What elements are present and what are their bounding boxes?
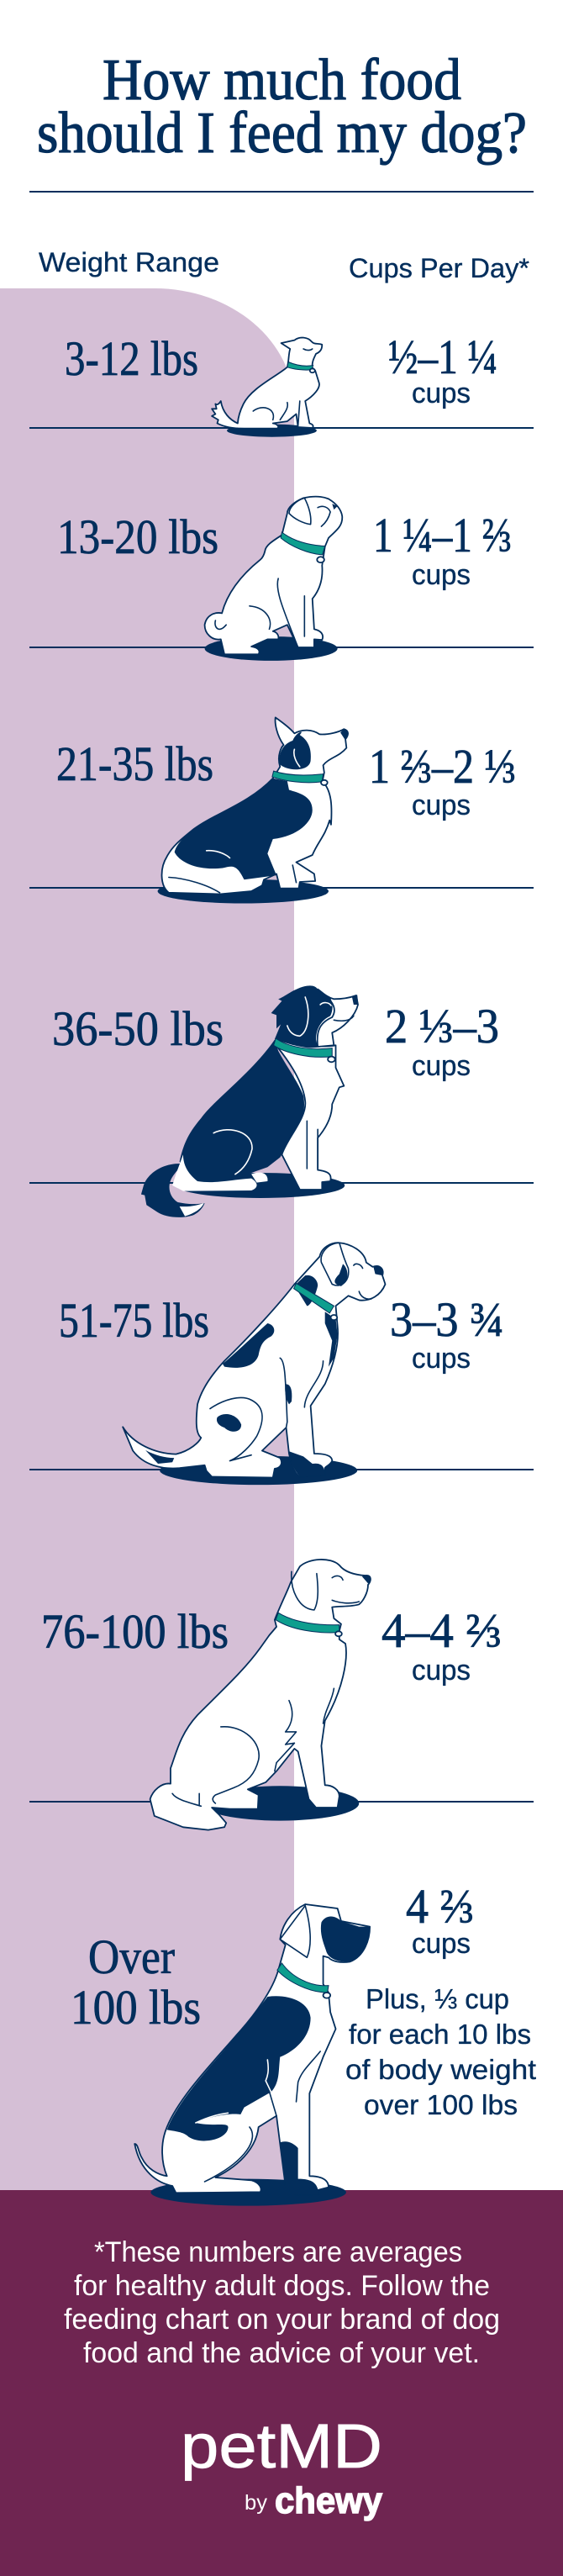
row 1 label: 3-12 lbs: 3-12 lbs — [65, 331, 198, 386]
row 7 label: over 100 lbs — [71, 1929, 201, 2035]
row 3 amount: 1 ⅔–2 ⅓ — [369, 739, 516, 794]
logo: petMD by chewy: chewy — [275, 2480, 383, 2521]
logo: petMD by chewy: by — [245, 2491, 268, 2515]
logo: petMD by chewy — [181, 2411, 383, 2521]
row 7 extra note: for each 10 lbs — [349, 2019, 531, 2050]
row 7 amount: 4 ⅔ — [406, 1879, 474, 1934]
title: How much food — [103, 48, 461, 113]
title: should I feed my dog? — [37, 101, 527, 166]
row 4 amount: 2 ⅓–3 — [385, 999, 499, 1053]
panel: lilac weight column — [0, 288, 294, 2191]
footer disclaimer: *These numbers are averages — [94, 2236, 462, 2268]
dog 4: black dog with white chest and dark tail — [141, 985, 358, 1217]
row 4 amount — [385, 999, 499, 1082]
heading: weight range: Weight Range — [39, 247, 219, 277]
footer disclaimer: for healthy adult dogs. Follow the — [74, 2270, 490, 2302]
row 1 amount: ½–1 ¼ — [388, 330, 497, 384]
row 6 label: 76-100 lbs: 76-100 lbs — [41, 1604, 229, 1659]
row 3 amount — [369, 739, 516, 821]
row 6 amount: 4–4 ⅔ — [381, 1603, 502, 1658]
row 3 amount: cups — [412, 789, 471, 821]
dog 6: fluffy white retriever — [150, 1560, 371, 1830]
row 7 extra note — [345, 1983, 536, 2120]
row 5 amount: cups — [412, 1343, 471, 1375]
footer disclaimer: feeding chart on your brand of dog — [64, 2304, 500, 2336]
row 7 extra note: Plus, ⅓ cup — [366, 1983, 509, 2014]
dog 3: black and white dog with pointed ear — [158, 717, 348, 904]
row 7 extra note: over 100 lbs — [364, 2089, 518, 2120]
row 4 label: 36-50 lbs: 36-50 lbs — [52, 1001, 224, 1056]
footer disclaimer: food and the advice of your vet. — [83, 2337, 480, 2369]
row 5 label: 51-75 lbs: 51-75 lbs — [59, 1293, 209, 1348]
dog 5: white dog with spots — [123, 1243, 385, 1485]
row 7 amount — [406, 1879, 474, 1960]
row 2 amount: 1 ¼–1 ⅔ — [373, 508, 512, 562]
row 6 amount: cups — [412, 1655, 471, 1687]
dog 1: small white dog — [212, 338, 322, 437]
row 7 label: over 100 lbs: Over — [88, 1929, 175, 1984]
row 1 amount — [388, 330, 497, 409]
row 1 amount: cups — [412, 377, 471, 409]
row 7 label: over 100 lbs: 100 lbs — [71, 1980, 201, 2035]
heading: cups per day: Cups Per Day* — [349, 253, 529, 283]
row 7 extra note: of body weight — [345, 2054, 536, 2085]
dog 2: pug — [205, 497, 342, 661]
row 4 amount: cups — [412, 1050, 471, 1082]
footer disclaimer — [64, 2236, 500, 2369]
row 7 amount: cups — [412, 1928, 471, 1960]
row 6 amount — [381, 1603, 502, 1687]
row 5 amount — [390, 1292, 504, 1375]
dog 7: large great dane with dark muzzle — [134, 1904, 370, 2206]
logo: petMD by chewy: petMD — [181, 2411, 382, 2481]
row 3 label: 21-35 lbs: 21-35 lbs — [56, 736, 213, 791]
row 2 label: 13-20 lbs: 13-20 lbs — [57, 509, 218, 564]
panel: plum footer band — [0, 2190, 563, 2576]
row 5 amount: 3–3 ¾ — [390, 1292, 504, 1347]
row 2 amount: cups — [412, 559, 471, 591]
row 2 amount — [373, 508, 512, 591]
title — [37, 48, 527, 166]
